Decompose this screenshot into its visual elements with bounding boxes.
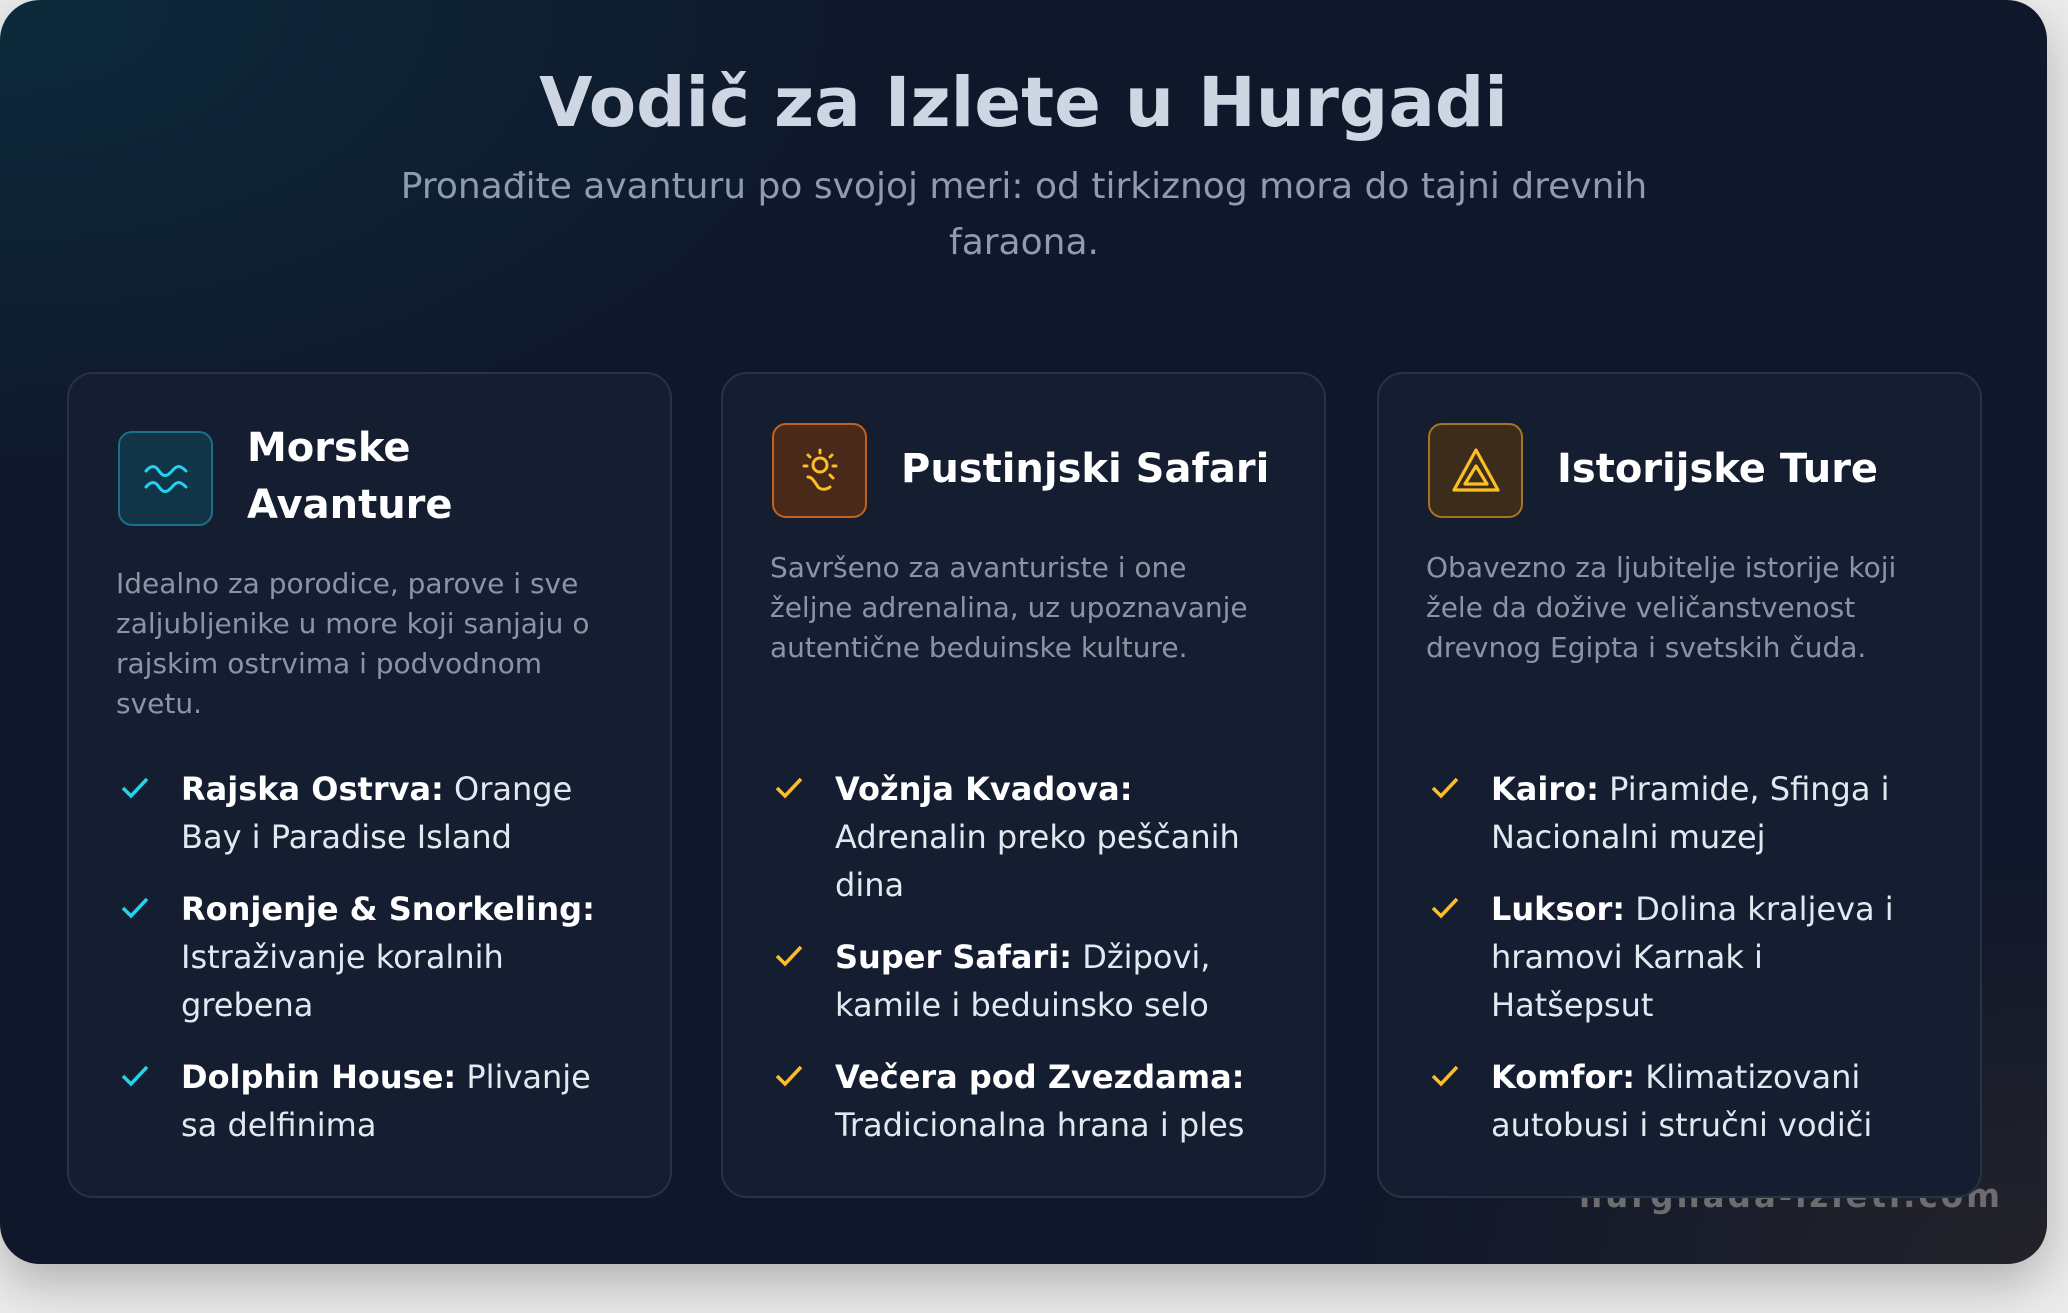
list: Dolphin House: Plivanje xyxy=(181,1058,591,1096)
list: Vožnja Kvadova: xyxy=(835,770,1132,808)
list: Nacionalni muzej xyxy=(1491,818,1766,856)
description: Savršeno za avanturiste i one xyxy=(770,551,1186,584)
description: Idealno za porodice, parove i sve xyxy=(116,567,578,600)
list: Tradicionalna hrana i ples xyxy=(835,1106,1244,1144)
list: Kairo: Piramide, Sfinga i xyxy=(1491,770,1889,808)
list: Luksor: Dolina kraljeva i xyxy=(1491,890,1894,928)
list: Rajska Ostrva: Orange xyxy=(181,770,572,808)
list: autobusi i stručni vodiči xyxy=(1491,1106,1872,1144)
list: sa delfinima xyxy=(181,1106,376,1144)
list xyxy=(776,770,1244,1144)
list: Super Safari: Džipovi, xyxy=(835,938,1210,976)
list xyxy=(122,770,595,1144)
card title: Avanture xyxy=(247,482,453,528)
panel: desert safari xyxy=(721,372,1326,1198)
panel: sea adventures xyxy=(67,372,672,1198)
watermark: hurghada-izleti.com xyxy=(1579,1177,2003,1215)
card title: Istorijske Ture xyxy=(1557,446,1878,492)
icon: pyramid xyxy=(1428,423,1523,518)
icon: sun xyxy=(772,423,867,518)
panel: historical tours xyxy=(1377,372,1982,1198)
list: Hatšepsut xyxy=(1491,986,1653,1024)
description: željne adrenalina, uz upoznavanje xyxy=(770,591,1248,624)
card title: Morske xyxy=(247,425,410,471)
list: Večera pod Zvezdama: xyxy=(835,1058,1244,1096)
list: Komfor: Klimatizovani xyxy=(1491,1058,1860,1096)
list: dina xyxy=(835,866,904,904)
list: Ronjenje & Snorkeling: xyxy=(181,890,595,928)
subtitle: faraona. xyxy=(949,222,1099,263)
description: zaljubljenike u more koji sanjaju o xyxy=(116,607,589,640)
list: Istraživanje koralnih xyxy=(181,938,504,976)
list: Adrenalin preko peščanih xyxy=(835,818,1240,856)
title: Vodič za Izlete u Hurgadi xyxy=(539,63,1508,143)
card title xyxy=(247,425,453,528)
description: žele da dožive veličanstvenost xyxy=(1426,591,1855,624)
list: kamile i beduinsko selo xyxy=(835,986,1209,1024)
description xyxy=(116,567,589,720)
subtitle: Pronađite avanturu po svojoj meri: od tirkiznog mora do tajni drevnih xyxy=(401,166,1647,207)
description: svetu. xyxy=(116,687,202,720)
description xyxy=(1426,551,1896,664)
description: autentične beduinske kulture. xyxy=(770,631,1187,664)
description: rajskim ostrvima i podvodnom xyxy=(116,647,542,680)
description: Obavezno za ljubitelje istorije koji xyxy=(1426,551,1896,584)
list: grebena xyxy=(181,986,313,1024)
card title: Pustinjski Safari xyxy=(901,446,1269,492)
list: hramovi Karnak i xyxy=(1491,938,1763,976)
list: Bay i Paradise Island xyxy=(181,818,512,856)
subtitle xyxy=(401,166,1647,263)
description: drevnog Egipta i svetskih čuda. xyxy=(1426,631,1866,664)
list xyxy=(1432,770,1894,1144)
description xyxy=(770,551,1248,664)
icon: waves xyxy=(118,431,213,526)
